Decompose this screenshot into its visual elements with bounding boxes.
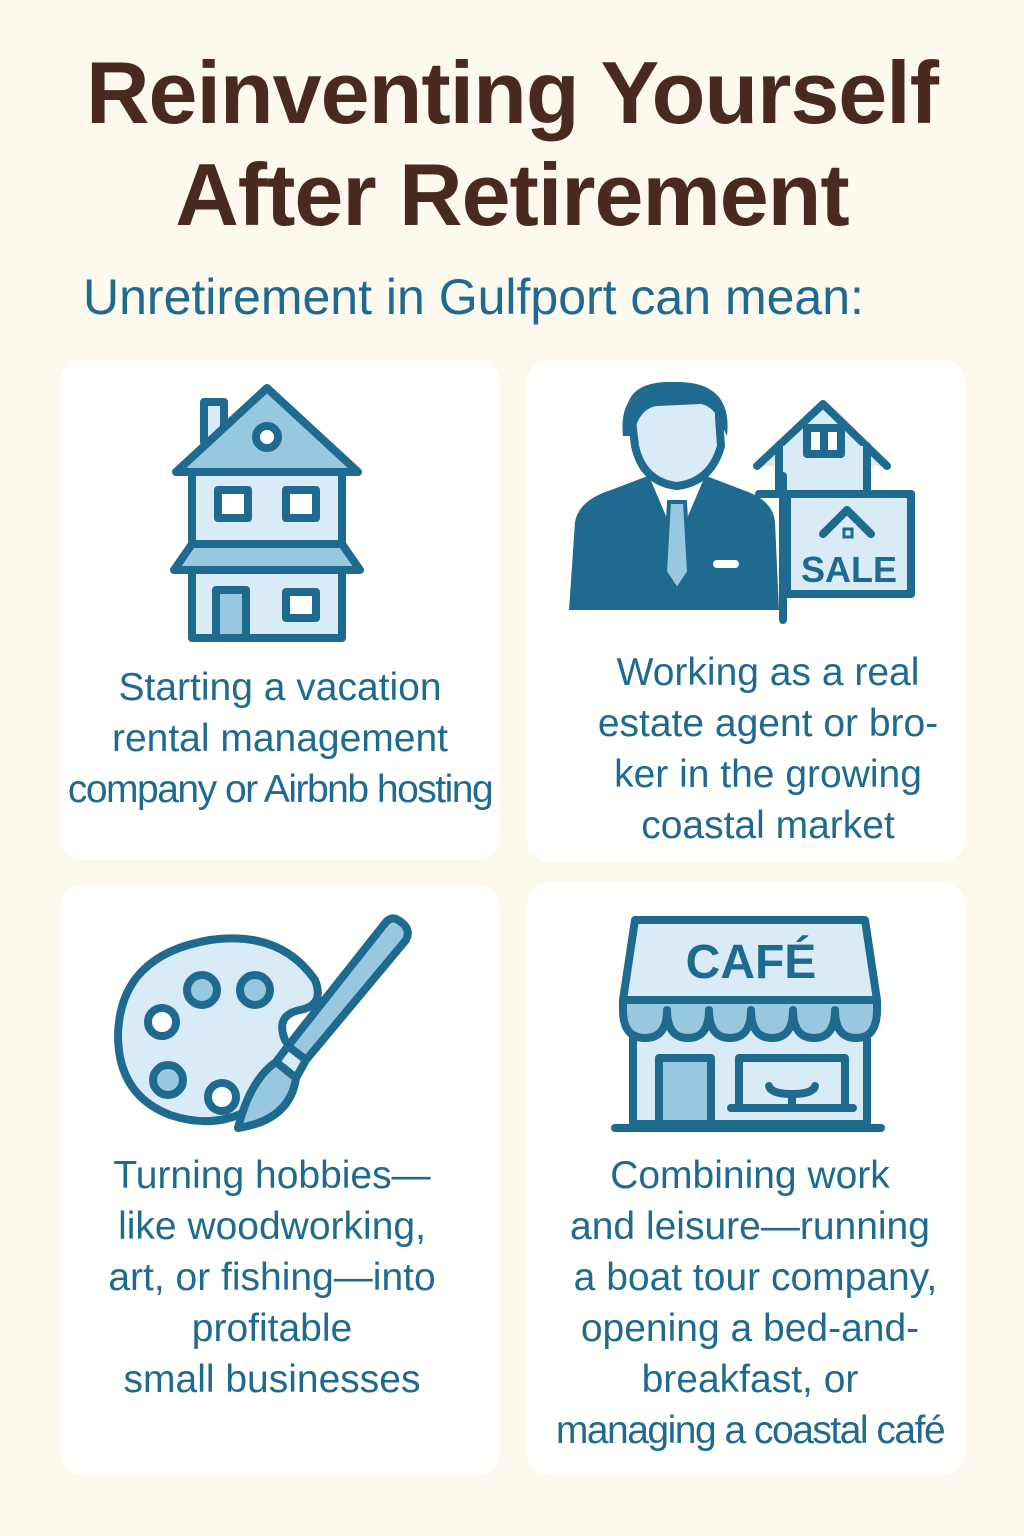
text: ker in the growing [614, 753, 922, 796]
text: opening a bed-and- [581, 1307, 919, 1350]
text: like woodworking, [118, 1205, 426, 1248]
text: Working as a real [617, 651, 919, 694]
text: small businesses [124, 1358, 420, 1401]
text [108, 1154, 436, 1401]
title: Reinventing Yourself [86, 43, 938, 142]
text: Starting a vacation [118, 666, 442, 709]
panel: vacation rental [60, 360, 500, 860]
text: Turning hobbies— [113, 1154, 431, 1197]
icon: palette and brush [114, 914, 412, 1132]
panel: real estate [527, 360, 965, 862]
icon: agent and sale sign: SALE [801, 549, 897, 590]
text [556, 1154, 944, 1452]
text [598, 651, 938, 847]
text [68, 666, 492, 811]
icon: house [170, 384, 364, 642]
title: After Retirement [175, 145, 849, 244]
text: art, or fishing—into [108, 1256, 436, 1299]
text: managing a coastal café [556, 1409, 944, 1452]
text: a boat tour company, [574, 1256, 937, 1299]
panel: work and leisure [527, 882, 965, 1475]
text: coastal market [641, 804, 895, 847]
text: and leisure—running [570, 1205, 930, 1248]
icon: agent and sale sign [569, 382, 915, 624]
panel: hobbies [60, 885, 500, 1475]
text: profitable [192, 1307, 352, 1350]
text: breakfast, or [642, 1358, 858, 1401]
text: company or Airbnb hosting [68, 768, 492, 811]
subtitle: Unretirement in Gulfport can mean: [83, 269, 864, 325]
icon: cafe storefront [611, 916, 885, 1132]
text: rental management [112, 717, 448, 760]
title [86, 43, 940, 244]
text: Combining work [610, 1154, 890, 1197]
text: estate agent or bro- [598, 702, 938, 745]
icon: cafe storefront: CAFÉ [686, 935, 816, 989]
